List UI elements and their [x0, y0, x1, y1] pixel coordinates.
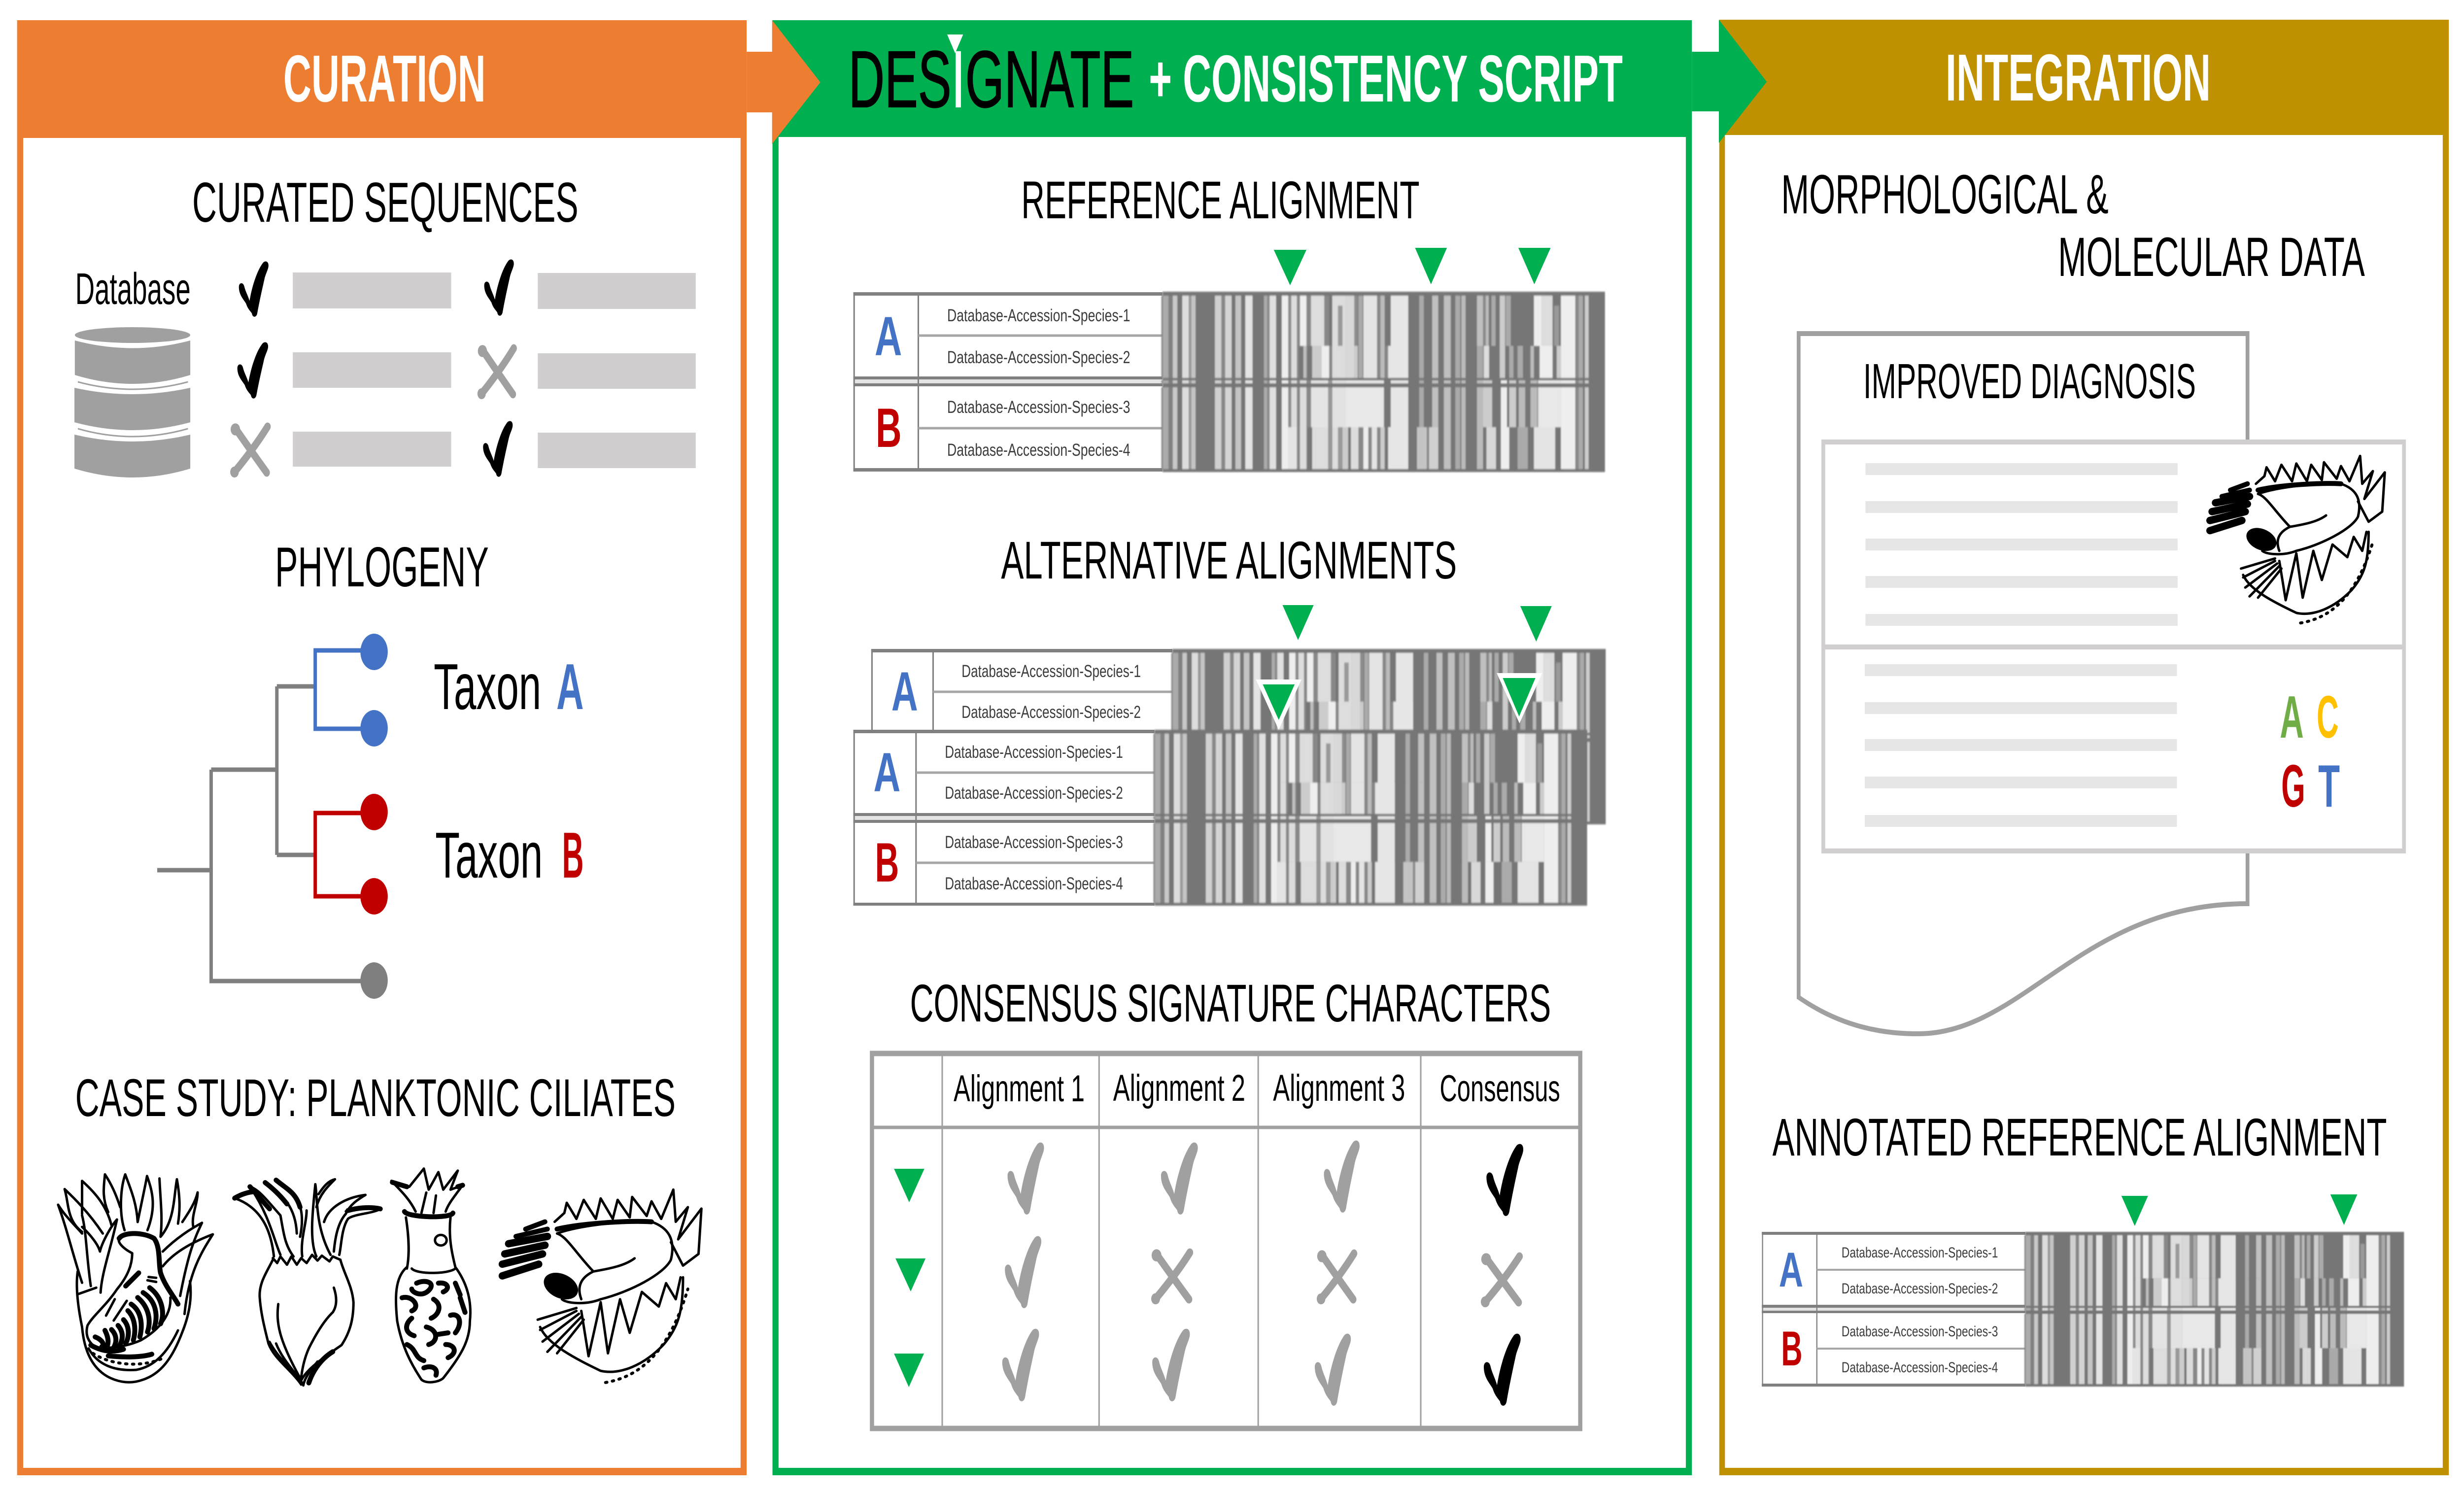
panel: curation [17, 20, 747, 1475]
markers: white-outlined triangles [1256, 673, 1542, 730]
chart: reference alignment: Database-Accession-Species-2 [947, 348, 1130, 367]
heading: reference alignment: REFERENCE ALIGNMENT [1021, 171, 1420, 230]
table column headers: Alignment 2 [1113, 1068, 1245, 1109]
logo: DeSIGnate: DESIGNATE [849, 34, 1134, 124]
label: taxon B: Taxon [435, 818, 543, 891]
heading: morphological and molecular data: MOLECULAR DATA [2058, 226, 2365, 288]
chart: front alternative alignment: Database-Accession-Species-1 [945, 743, 1123, 762]
chart: front alternative alignment: Database-Accession-Species-3 [945, 833, 1123, 852]
heading: alternative alignments: ALTERNATIVE ALIGNMENTS [1001, 531, 1457, 590]
illustration: ciliate 3 [391, 1169, 470, 1382]
illustration: ciliate 1 [58, 1174, 213, 1382]
heading: improved diagnosis: IMPROVED DIAGNOSIS [1863, 353, 2196, 408]
chart: annotated reference alignment: Database-Accession-Species-1 [1842, 1244, 1998, 1261]
markers: alternative alignment triangles [1282, 605, 1552, 642]
table column headers: Alignment 1 [954, 1068, 1085, 1110]
icon: database cylinder [74, 327, 190, 477]
chart: annotated reference alignment: B [1781, 1321, 1803, 1376]
chart: back alternative alignment [871, 649, 1606, 824]
heading: curation: CURATION [283, 41, 486, 116]
chart: reference alignment: A [875, 305, 902, 368]
chart: phylogenetic tree [157, 634, 388, 999]
panel: integration [1692, 20, 2449, 1475]
table column headers: Consensus [1440, 1068, 1560, 1110]
nucleotide letters: T [2318, 752, 2340, 820]
chart: reference alignment: Database-Accession-Species-4 [947, 441, 1130, 460]
label: database: Database [75, 264, 191, 314]
markers: reference alignment triangles [1274, 248, 1551, 285]
heading: integration: INTEGRATION [1946, 40, 2211, 115]
chart: annotated reference alignment: Database-Accession-Species-3 [1842, 1323, 1998, 1340]
heading: consensus signature characters: CONSENSUS SIGNATURE CHARACTERS [910, 974, 1551, 1033]
table: consensus signature characters [872, 1053, 1580, 1428]
chart: annotated reference alignment: Database-Accession-Species-4 [1842, 1359, 1998, 1376]
label: taxon A: Taxon [434, 650, 541, 723]
chart: annotated reference alignment: A [1779, 1242, 1803, 1297]
chart: front alternative alignment [854, 730, 1587, 906]
illustration: ciliate 4 [502, 1189, 701, 1383]
heading: case study: CASE STUDY: PLANKTONIC CILIATES [75, 1069, 676, 1128]
nucleotide letters: G [2281, 752, 2305, 820]
chart: back alternative alignment: Database-Accession-Species-2 [961, 703, 1141, 722]
text lines: morphological [1865, 463, 2178, 626]
chart: annotated reference alignment [1762, 1232, 2404, 1387]
table check marks and crosses [1002, 1141, 1523, 1406]
text lines: molecular [1865, 664, 2177, 827]
document: improved diagnosis [1799, 334, 2404, 1034]
illustration: ciliate 2 [235, 1179, 381, 1386]
arrow: designate to integration [1692, 20, 1767, 143]
chart: reference alignment: Database-Accession-Species-3 [947, 398, 1130, 417]
heading: phylogeny: PHYLOGENY [275, 536, 489, 599]
table column headers: Alignment 3 [1273, 1068, 1405, 1109]
heading: consistency script: + CONSISTENCY SCRIPT [1149, 41, 1623, 116]
nucleotide letters [2280, 683, 2340, 820]
chart: back alternative alignment: A [891, 661, 918, 723]
chart: reference alignment [854, 292, 1605, 472]
chart: front alternative alignment: B [875, 832, 899, 894]
heading: morphological and molecular data [1781, 164, 2365, 288]
label: taxon B: B [562, 818, 583, 891]
chart: back alternative alignment: Database-Accession-Species-1 [961, 662, 1141, 681]
chart: front alternative alignment: Database-Accession-Species-2 [945, 783, 1123, 803]
illustration: ciliate in diagnosis [2210, 456, 2385, 623]
nucleotide letters: A [2280, 683, 2304, 751]
icons: sequence check marks and crosses [230, 259, 514, 477]
inset: diagnosis table [1823, 442, 2404, 851]
table column headers [954, 1068, 1560, 1110]
arrow: curation to designate [747, 20, 821, 144]
label: taxon A: A [556, 650, 583, 723]
heading: curated sequences: CURATED SEQUENCES [192, 171, 579, 234]
nucleotide letters: C [2317, 683, 2339, 751]
heading: morphological and molecular data: MORPHOLOGICAL & [1781, 164, 2109, 226]
table row markers [894, 1169, 925, 1387]
markers: annotated alignment triangles [2122, 1194, 2357, 1226]
chart: annotated reference alignment: Database-Accession-Species-2 [1842, 1280, 1998, 1297]
chart: reference alignment: Database-Accession-Species-1 [947, 306, 1130, 325]
chart: front alternative alignment: A [874, 742, 900, 804]
chart: front alternative alignment: Database-Accession-Species-4 [945, 874, 1123, 893]
panel: designate plus consistency script [747, 20, 1692, 1475]
chart: reference alignment: B [876, 397, 902, 459]
sequence bars [293, 272, 696, 468]
